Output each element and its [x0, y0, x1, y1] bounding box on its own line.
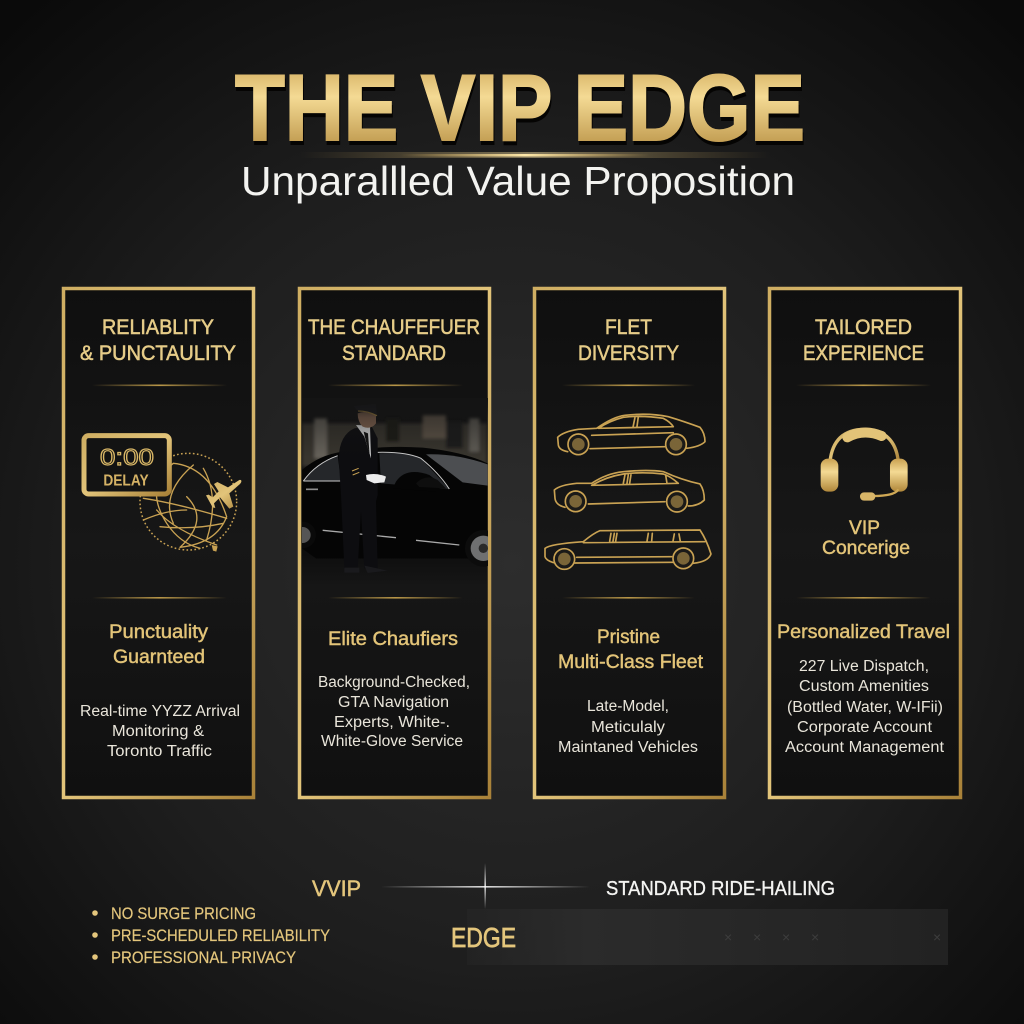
photo fade: [302, 398, 488, 454]
blurred building: [302, 415, 487, 467]
body text: [80, 703, 240, 760]
heading: chauffeur: STANDARD: [342, 342, 446, 365]
icon: sedan: [558, 414, 705, 455]
x marks: ×: [753, 929, 761, 945]
body text: GTA Navigation: [338, 694, 449, 711]
body text: Meticulaly: [591, 719, 665, 736]
bullet list: PRE-SCHEDULED RELIABILITY: [111, 926, 330, 945]
subheading: Personalized Travel: [777, 622, 950, 643]
body text: Toronto Traffic: [107, 743, 212, 760]
delay clock: [84, 436, 169, 494]
comparison cross lines: [381, 863, 590, 909]
heading: fleet: DIVERSITY: [578, 342, 679, 365]
icon: delay clock and globe with plane: [84, 436, 241, 552]
icon label: VIP: [849, 518, 880, 539]
plane: [206, 480, 241, 509]
car: [302, 446, 488, 566]
x marks: ×: [933, 929, 941, 945]
panel: fleet diversity: [534, 288, 724, 798]
globe: [140, 453, 237, 552]
bullet list: NO SURGE PRICING: [111, 904, 256, 923]
delay clock: 0:00: [100, 444, 154, 470]
title: THE VIP EDGE: [236, 59, 806, 164]
photo: chauffeur beside black car: [302, 398, 488, 568]
subheading: Elite Chaufiers: [328, 629, 458, 650]
x marks: ×: [811, 929, 819, 945]
bullet list: [92, 904, 330, 967]
body text: Background-Checked,: [318, 674, 470, 691]
heading: fleet: [578, 316, 679, 365]
body text: White-Glove Service: [321, 733, 463, 750]
x marks: ×: [782, 929, 790, 945]
body text: Maintaned Vehicles: [558, 739, 698, 756]
panel: reliability and punctuality: [64, 288, 254, 798]
icon label: [822, 518, 910, 559]
chauffeur: [339, 404, 388, 573]
body text: Monitoring &: [112, 723, 205, 740]
subheading: [558, 627, 704, 673]
subheading: Punctuality: [109, 622, 209, 643]
ground: [302, 549, 312, 556]
subheading: [109, 622, 209, 668]
delay clock: DELAY: [103, 472, 149, 489]
heading: reliability: [80, 316, 236, 365]
heading: chauffeur: THE CHAUFEFUER: [308, 316, 480, 339]
body text: Account Management: [785, 739, 945, 756]
heading: reliability: RELIABLITY: [102, 316, 214, 339]
panel: tailored experience: [770, 288, 960, 798]
bullet list: PROFESSIONAL PRIVACY: [111, 948, 296, 967]
body text: Experts, White-.: [334, 714, 450, 731]
heading: tailored: TAILORED: [815, 316, 912, 339]
icon: headset: [821, 429, 908, 501]
panel: chauffeur standard: [289, 288, 502, 798]
x marks: ×: [724, 929, 732, 945]
icon label: Concerige: [822, 538, 910, 559]
label: EDGE: EDGE: [451, 922, 516, 953]
body text: [558, 698, 698, 756]
x marks: [724, 929, 941, 945]
icon: long sedan: [554, 470, 704, 512]
body text: [785, 658, 945, 756]
icon: limousine: [545, 530, 711, 569]
label: standard ride-hailing: STANDARD RIDE-HAILING: [606, 878, 835, 900]
subheading: Multi-Class Fleet: [558, 652, 704, 673]
body text: 227 Live Dispatch,: [799, 658, 929, 675]
heading: fleet: FLET: [605, 316, 652, 339]
body text: Real-time YYZZ Arrival: [80, 703, 240, 720]
subheading: Guarnteed: [113, 647, 205, 668]
heading: reliability: & PUNCTAULITY: [80, 342, 236, 365]
icons: three vehicle classes: [545, 414, 711, 569]
body text: Corporate Account: [797, 719, 933, 736]
heading: tailored: [803, 316, 924, 365]
subtitle: Unparallled Value Proposition: [241, 158, 795, 204]
label: VVIP: VVIP: [312, 876, 361, 901]
title: THE VIP EDGE: [235, 55, 805, 160]
heading: tailored: EXPERIENCE: [803, 342, 924, 365]
body text: Custom Amenities: [799, 678, 929, 695]
heading: chauffeur: [308, 316, 480, 365]
comparison bar: [467, 909, 948, 965]
gold glow line: [300, 152, 770, 158]
body text: Late-Model,: [587, 698, 669, 715]
body text: (Bottled Water, W-IFii): [787, 699, 943, 716]
subheading: Pristine: [597, 627, 660, 648]
body text: [318, 674, 470, 750]
